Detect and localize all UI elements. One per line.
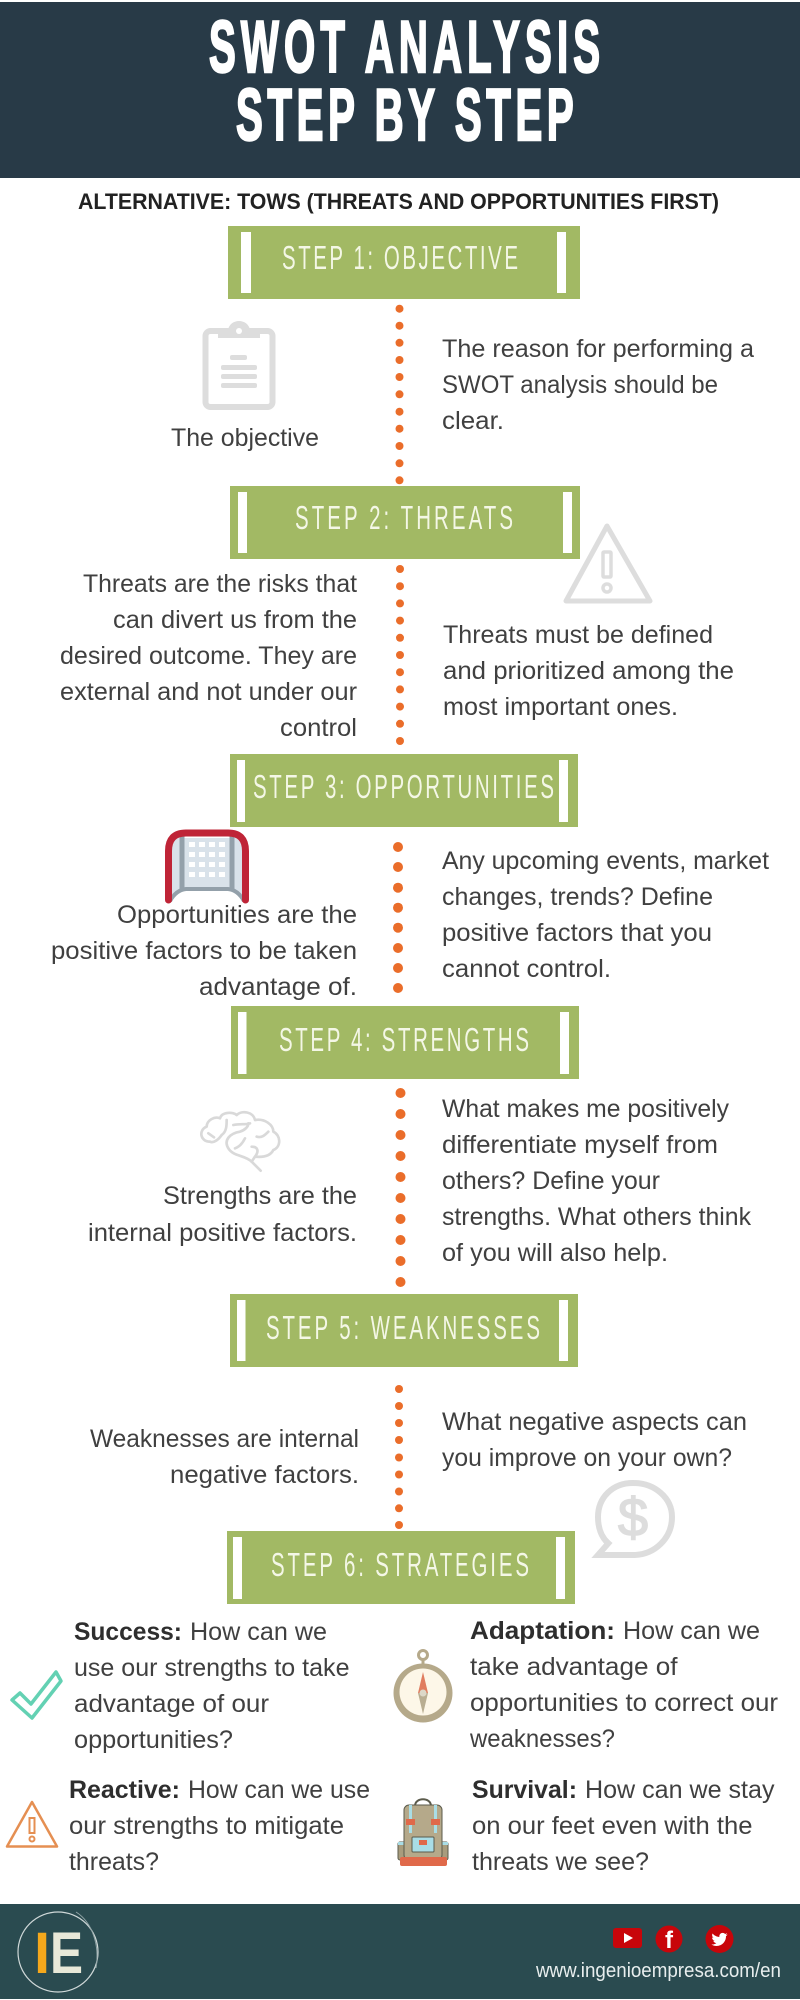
text: opportunities advice: Any upcoming events, market <box>442 847 769 875</box>
text: threats definition: control <box>280 714 357 742</box>
text: threats advice: and prioritized among the <box>443 657 734 685</box>
text: strengths definition <box>88 1182 357 1247</box>
step 3 banner: STEP 3: OPPORTUNITIES <box>253 768 554 805</box>
text: weaknesses definition: negative factors. <box>170 1461 359 1489</box>
text: threats advice <box>443 621 734 721</box>
text: opportunities advice: changes, trends? Define <box>442 883 713 911</box>
text: opportunities definition: advantage of. <box>199 973 357 1001</box>
title <box>209 8 600 156</box>
strategy: survival <box>398 1776 775 1876</box>
strategy: adaptation <box>394 1617 778 1753</box>
text: opportunities advice: cannot control. <box>442 955 611 983</box>
strategy: survival: on our feet even with the <box>472 1812 752 1840</box>
icon: clipboard <box>206 321 272 407</box>
text: weaknesses advice: What negative aspects can <box>442 1408 747 1436</box>
logo: E <box>50 1921 83 1986</box>
text: opportunities advice <box>442 847 769 983</box>
step 2 banner: STEP 2: THREATS <box>295 499 513 536</box>
website url: www.ingenioempresa.com/en <box>535 1960 781 1982</box>
strategy: success: advantage of our <box>74 1690 269 1718</box>
icon: backpack <box>398 1799 448 1866</box>
subtitle: ALTERNATIVE: TOWS (THREATS AND OPPORTUNITIES FIRST) <box>78 189 719 214</box>
text: threats definition: desired outcome. They are <box>60 642 357 670</box>
icon: goal net <box>168 833 246 912</box>
dotted connector 3 <box>393 842 403 993</box>
text: weaknesses advice <box>442 1408 747 1472</box>
text: threats definition <box>60 570 357 742</box>
step 5 banner: STEP 5: WEAKNESSES <box>266 1309 540 1346</box>
text: strengths advice: others? Define your <box>442 1167 660 1195</box>
icon: facebook <box>656 1926 682 1954</box>
text: opportunities definition: Opportunities are the <box>117 901 357 929</box>
dotted connector 5 <box>395 1385 403 1529</box>
text: weaknesses advice: you improve on your own? <box>442 1444 732 1472</box>
strategy: reactive: Reactive: <box>69 1776 180 1804</box>
strategy: success: Success: <box>74 1618 182 1646</box>
text: opportunities advice: positive factors that you <box>442 919 712 947</box>
step 4 banner: STEP 4: STRENGTHS <box>279 1021 529 1058</box>
icon: warning triangle <box>566 526 650 601</box>
strategy: reactive: threats? <box>69 1848 159 1876</box>
strategy: success <box>12 1618 350 1754</box>
text: threats advice: most important ones. <box>443 693 678 721</box>
text: strengths definition: internal positive factors. <box>88 1219 357 1247</box>
step 2 banner <box>230 486 580 559</box>
strategy: reactive: our strengths to mitigate <box>69 1812 344 1840</box>
icon: twitter <box>706 1925 734 1953</box>
icon: brain <box>201 1112 279 1171</box>
strategy: success: use our strengths to take <box>74 1654 350 1682</box>
icon: orange warning triangle <box>7 1802 57 1846</box>
text: the objective: The objective <box>171 424 319 452</box>
footer <box>0 1904 800 1999</box>
step 6 banner <box>227 1531 575 1604</box>
text: strengths advice: What makes me positively <box>442 1095 729 1123</box>
step 3 banner <box>230 754 578 827</box>
text: weaknesses definition: Weaknesses are internal <box>90 1425 359 1453</box>
text: step 1 description: clear. <box>442 407 504 435</box>
strategy: adaptation: weaknesses? <box>469 1725 615 1753</box>
text: strengths definition: Strengths are the <box>163 1182 357 1210</box>
strategy: success: How can we <box>190 1618 327 1646</box>
text: threats definition: can divert us from the <box>113 606 357 634</box>
dotted connector 4 <box>396 1088 406 1287</box>
strategy: adaptation: opportunities to correct our <box>470 1689 778 1717</box>
strategy: survival: How can we stay <box>585 1776 775 1804</box>
step 4 banner <box>231 1006 579 1079</box>
strategy: survival: Survival: <box>472 1776 577 1804</box>
logo: I <box>34 1921 50 1986</box>
strategy: reactive <box>7 1776 370 1876</box>
icon: dollar speech bubble <box>598 1483 672 1555</box>
strategy: success: opportunities? <box>74 1726 233 1754</box>
text: weaknesses definition <box>90 1425 359 1489</box>
icon: youtube <box>613 1928 642 1948</box>
text: opportunities definition: positive factors to be taken <box>51 937 357 965</box>
text: step 1 description <box>442 335 754 435</box>
text: threats definition: Threats are the risks that <box>83 570 357 598</box>
text: strengths advice: strengths. What others think <box>442 1203 751 1231</box>
strategy: adaptation: take advantage of <box>470 1653 678 1681</box>
text: strengths advice: differentiate myself from <box>442 1131 718 1159</box>
text: strengths advice <box>442 1095 751 1267</box>
icon: facebook: f <box>665 1927 674 1954</box>
step 5 banner <box>230 1294 578 1367</box>
text: step 1 description: SWOT analysis should be <box>442 371 718 399</box>
step 1 banner <box>228 226 580 299</box>
logo <box>18 1912 98 1992</box>
icon: check mark <box>12 1672 61 1718</box>
dotted connector 1 <box>396 305 404 484</box>
dotted connector 2 <box>396 565 404 745</box>
icon: dollar speech bubble: $ <box>618 1488 648 1548</box>
text: threats advice: Threats must be defined <box>443 621 713 649</box>
text: step 1 description: The reason for performing a <box>442 335 754 363</box>
strategy: adaptation: How can we <box>623 1617 760 1645</box>
title: STEP BY STEP <box>236 76 574 156</box>
strategy: adaptation: Adaptation: <box>470 1617 615 1645</box>
strategy: reactive: How can we use <box>188 1776 370 1804</box>
step 1 banner: STEP 1: OBJECTIVE <box>282 239 518 276</box>
text: threats definition: external and not under our <box>60 678 357 706</box>
header banner <box>0 2 800 178</box>
text: opportunities definition <box>51 901 357 1001</box>
icon: compass <box>394 1650 452 1722</box>
text: strengths advice: of you will also help. <box>442 1239 668 1267</box>
step 6 banner: STEP 6: STRATEGIES <box>271 1546 529 1583</box>
strategy: survival: threats we see? <box>472 1848 649 1876</box>
title: SWOT ANALYSIS <box>209 8 600 88</box>
